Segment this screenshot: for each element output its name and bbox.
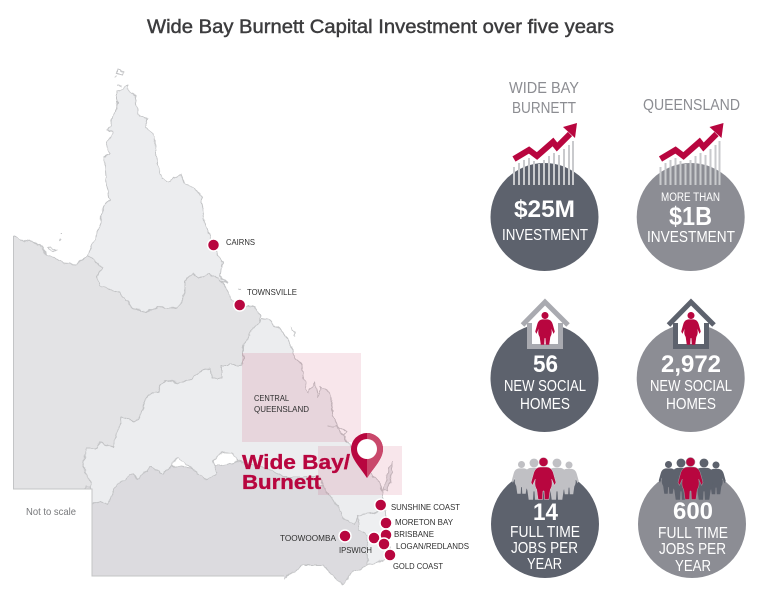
stat: queensland jobs: FULL TIME [658, 525, 728, 542]
icon: house with person [668, 301, 714, 347]
stat: wide bay jobs: 14 [533, 499, 559, 526]
city labels: TOWNSVILLE [247, 287, 297, 297]
label: central queensland: CENTRAL [254, 393, 289, 403]
stat: wide bay social homes: NEW SOCIAL [504, 378, 586, 395]
region: south west [86, 462, 368, 585]
highlight: central queensland [242, 353, 361, 442]
heading: wide bay burnett column: WIDE BAY [509, 80, 579, 97]
heading: wide bay burnett: Wide Bay/ [242, 451, 350, 474]
note: not to scale: Not to scale [26, 506, 76, 518]
stat: wide bay jobs: FULL TIME [510, 524, 580, 541]
city labels: CAIRNS [226, 237, 255, 247]
stat: wide bay jobs: YEAR [527, 556, 562, 573]
city labels: BRISBANE [394, 529, 434, 539]
heading: wide bay burnett column [509, 80, 579, 117]
icon: map pin [351, 433, 383, 478]
city labels: GOLD COAST [393, 561, 443, 571]
icon: group of people [512, 458, 579, 500]
city markers [208, 239, 396, 561]
icon: rising chart [660, 123, 724, 185]
stat: queensland investment: MORE THAN [661, 192, 720, 204]
region: central and wide bay [83, 318, 385, 525]
title: Wide Bay Burnett Capital Investment over five years [147, 17, 614, 38]
stat: queensland jobs: 600 [673, 498, 713, 525]
region: north west [8, 233, 261, 494]
stat: wide bay investment: $25M [514, 196, 575, 223]
stat: wide bay social homes: HOMES [520, 396, 570, 413]
city labels: TOOWOOMBA [280, 533, 336, 543]
stat: queensland social homes: HOMES [666, 396, 716, 413]
stat: wide bay jobs: JOBS PER [511, 540, 578, 557]
stat: queensland investment: $1B [669, 201, 712, 231]
region: far north [88, 85, 227, 312]
highlight: wide bay burnett [318, 446, 402, 495]
icon: rising chart [513, 123, 577, 185]
heading: queensland column: QUEENSLAND [643, 97, 740, 114]
stat: queensland investment [637, 123, 745, 271]
label: central queensland: QUEENSLAND [254, 404, 309, 414]
label: central queensland [254, 393, 309, 414]
heading: wide bay burnett [242, 451, 350, 494]
city labels [226, 237, 469, 571]
stat: queensland jobs: YEAR [675, 558, 711, 575]
city labels: MORETON BAY [395, 517, 453, 527]
region: south east corner [358, 510, 391, 565]
stat: queensland investment: INVESTMENT [647, 229, 735, 246]
heading: wide bay burnett column: BURNETT [512, 100, 576, 117]
city labels: SUNSHINE COAST [391, 502, 460, 512]
stat: queensland jobs: JOBS PER [659, 541, 726, 558]
city labels: IPSWICH [339, 545, 372, 555]
icon: house with person [522, 301, 568, 347]
stat: queensland social homes: NEW SOCIAL [650, 378, 732, 395]
city labels: LOGAN/REDLANDS [396, 541, 469, 551]
icon: group of people [659, 458, 726, 500]
stat: queensland social homes: 2,972 [661, 351, 721, 378]
stat: wide bay jobs [491, 458, 599, 578]
stat: wide bay investment: INVESTMENT [502, 227, 588, 244]
islands [48, 70, 392, 490]
stat: queensland jobs [638, 458, 746, 578]
heading: wide bay burnett: Burnett [242, 471, 321, 494]
stat: wide bay investment [490, 123, 598, 271]
map west and south border [14, 236, 284, 576]
map of Queensland [8, 70, 392, 585]
stat: wide bay social homes: 56 [533, 351, 558, 378]
stat: queensland social homes [637, 301, 745, 432]
stat: wide bay social homes [490, 301, 598, 432]
